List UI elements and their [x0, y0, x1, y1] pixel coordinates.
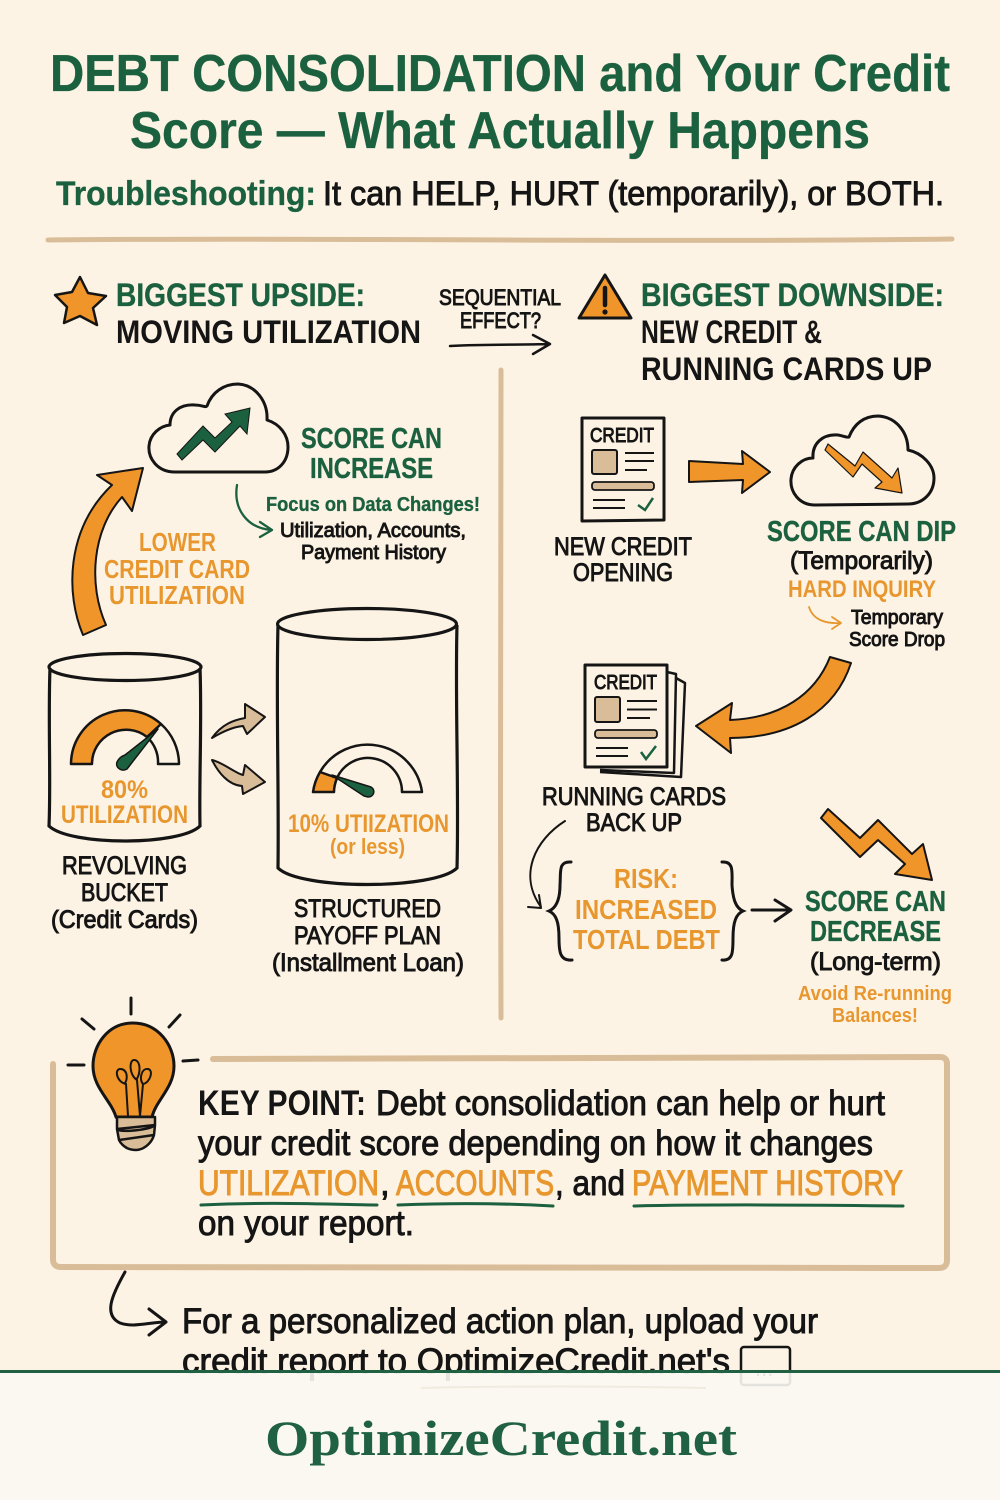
heading: downside label: BIGGEST DOWNSIDE:: [641, 277, 944, 313]
arrow: score to data changes: [236, 485, 272, 537]
callout: risk increased total debt: INCREASED: [575, 894, 717, 925]
text: key point: Debt consolidation can help or hurt: [376, 1084, 885, 1123]
icon: new credit document: [582, 418, 664, 521]
text: call to action: credit report to OptimizeCredit.net's: [182, 1342, 730, 1381]
text: key point: KEY POINT:: [198, 1084, 366, 1123]
callout: risk increased total debt: [549, 862, 743, 960]
subtitle: Troubleshooting:: [56, 175, 316, 213]
label: score can decrease: [798, 886, 952, 1027]
label: score can increase: [301, 423, 442, 485]
heading: new credit and running cards up: [641, 314, 932, 387]
icon: new credit document: CREDIT: [590, 425, 654, 447]
label: score can decrease: (Long-term): [810, 948, 941, 976]
bucket caption: (Installment Loan): [272, 949, 464, 977]
sequential effect arrow label: EFFECT?: [460, 308, 541, 333]
heading: new credit and running cards up: RUNNING CARDS UP: [641, 351, 932, 387]
label: score can increase: INCREASE: [310, 453, 433, 485]
arrow: new credit to score dip: [689, 451, 770, 493]
arrow: running cards to risk: [528, 821, 565, 908]
label: score can dip: (Temporarily): [790, 547, 933, 575]
heading: moving utilization: MOVING UTILIZATION: [116, 314, 421, 350]
arrow: risk to decrease: [752, 900, 791, 921]
panel: footer band: [0, 1370, 1000, 1500]
panel: biggest upside heading: [55, 277, 421, 350]
label: lower credit card utilization: LOWER: [139, 527, 216, 557]
icon: light bulb: [68, 998, 198, 1150]
bucket shape: [277, 608, 458, 884]
icon: stacked credit documents: [585, 665, 685, 777]
icon: warning triangle: [579, 275, 631, 318]
gauge value: 10% UTIIZATION: [288, 810, 449, 838]
arrow: curved orange to running cards: [696, 657, 851, 753]
text: key point: ACCOUNTS: [396, 1164, 554, 1203]
gauge 80%: [71, 710, 179, 770]
text: focus on data changes: Focus on Data Changes!: [266, 494, 480, 516]
arrow: key point to action plan: [111, 1272, 166, 1335]
gauge value: [288, 810, 449, 859]
gauge value: [61, 776, 188, 829]
icon: cloud with rising arrow: [149, 384, 288, 472]
text: key point: UTILIZATION: [198, 1164, 379, 1203]
text: temporary score drop: Score Drop: [849, 629, 945, 651]
text: key point: your credit score depending on how it changes: [198, 1124, 873, 1163]
caption: new credit opening: [554, 533, 692, 587]
label: score can decrease: SCORE CAN: [805, 886, 946, 918]
text: key point: on your report.: [198, 1204, 414, 1243]
icon: large falling zigzag arrow: [821, 809, 932, 880]
text: focus on data changes: Utilization, Accounts,: [280, 520, 466, 542]
text: call to action: ...: [755, 1356, 773, 1381]
label: lower credit card utilization: CREDIT CARD: [104, 554, 250, 584]
icon: star: [55, 277, 106, 325]
gauge value: (or less): [330, 834, 405, 859]
icon: stacked credit documents: CREDIT: [594, 672, 657, 694]
subtitle: It can HELP, HURT (temporarily), or BOTH.: [323, 175, 944, 213]
bucket caption: REVOLVING: [62, 852, 187, 880]
text: call to action: For a personalized action plan, upload your: [182, 1302, 818, 1341]
caption: running cards back up: [542, 783, 726, 837]
subtitle: [56, 175, 944, 213]
gauge value: 80%: [101, 776, 148, 804]
label: score can decrease: Balances!: [832, 1005, 918, 1027]
text: key point: [198, 1084, 903, 1243]
bucket caption: [272, 895, 464, 977]
bucket caption: STRUCTURED: [294, 895, 441, 923]
text: key point: PAYMENT HISTORY: [632, 1164, 903, 1203]
caption: new credit opening: OPENING: [573, 559, 673, 587]
bucket caption: [51, 852, 198, 934]
label: score can dip: [767, 516, 956, 603]
text: key point: , and: [555, 1164, 625, 1203]
text: focus on data changes: Payment History: [301, 542, 446, 564]
text: focus on data changes: [266, 494, 480, 564]
brand wordmark: OptimizeCredit.net: [265, 1410, 737, 1466]
arrow: hard inquiry to drop: [809, 607, 841, 629]
text: temporary score drop: Temporary: [851, 607, 943, 629]
arrows: transfer between buckets: [212, 704, 265, 794]
panel: biggest downside heading: [579, 275, 944, 387]
caption: new credit opening: NEW CREDIT: [554, 533, 692, 561]
heading: new credit and running cards up: NEW CREDIT &: [641, 314, 822, 350]
caption: running cards back up: RUNNING CARDS: [542, 783, 726, 811]
label: score can decrease: DECREASE: [810, 916, 941, 948]
gauge value: UTILIZATION: [61, 801, 188, 829]
panel: structured payoff plan: [272, 608, 464, 977]
bucket caption: PAYOFF PLAN: [294, 922, 441, 950]
callout: risk increased total debt: TOTAL DEBT: [573, 924, 720, 955]
icon: cloud with falling arrow: [791, 416, 934, 505]
title: Score — What Actually Happens: [130, 102, 870, 160]
bucket caption: (Credit Cards): [51, 906, 198, 934]
label: score can dip: SCORE CAN DIP: [767, 516, 956, 548]
callout: risk increased total debt: RISK:: [614, 863, 678, 894]
sequential effect arrow label: SEQUENTIAL: [439, 285, 561, 310]
label: lower credit card utilization: [104, 527, 250, 610]
text: temporary score drop: [849, 607, 945, 651]
text: key point: ,: [380, 1164, 390, 1203]
panel: key point box: [53, 1057, 947, 1268]
panel: revolving bucket: [49, 654, 201, 934]
label: score can increase: SCORE CAN: [301, 423, 442, 455]
gauge 10%: [313, 745, 422, 797]
caption: running cards back up: BACK UP: [586, 809, 682, 837]
label: score can dip: HARD INQUIRY: [788, 576, 936, 603]
sequential effect arrow label: [439, 285, 561, 354]
bucket caption: BUCKET: [81, 879, 168, 907]
bucket shape: [49, 654, 201, 841]
label: lower credit card utilization: UTILIZATION: [109, 580, 245, 610]
label: score can decrease: Avoid Re-running: [798, 983, 952, 1005]
text: call to action: [182, 1302, 818, 1385]
heading: upside label: BIGGEST UPSIDE:: [116, 277, 365, 313]
title: [50, 45, 950, 160]
arrow: large orange upward: [72, 468, 143, 635]
